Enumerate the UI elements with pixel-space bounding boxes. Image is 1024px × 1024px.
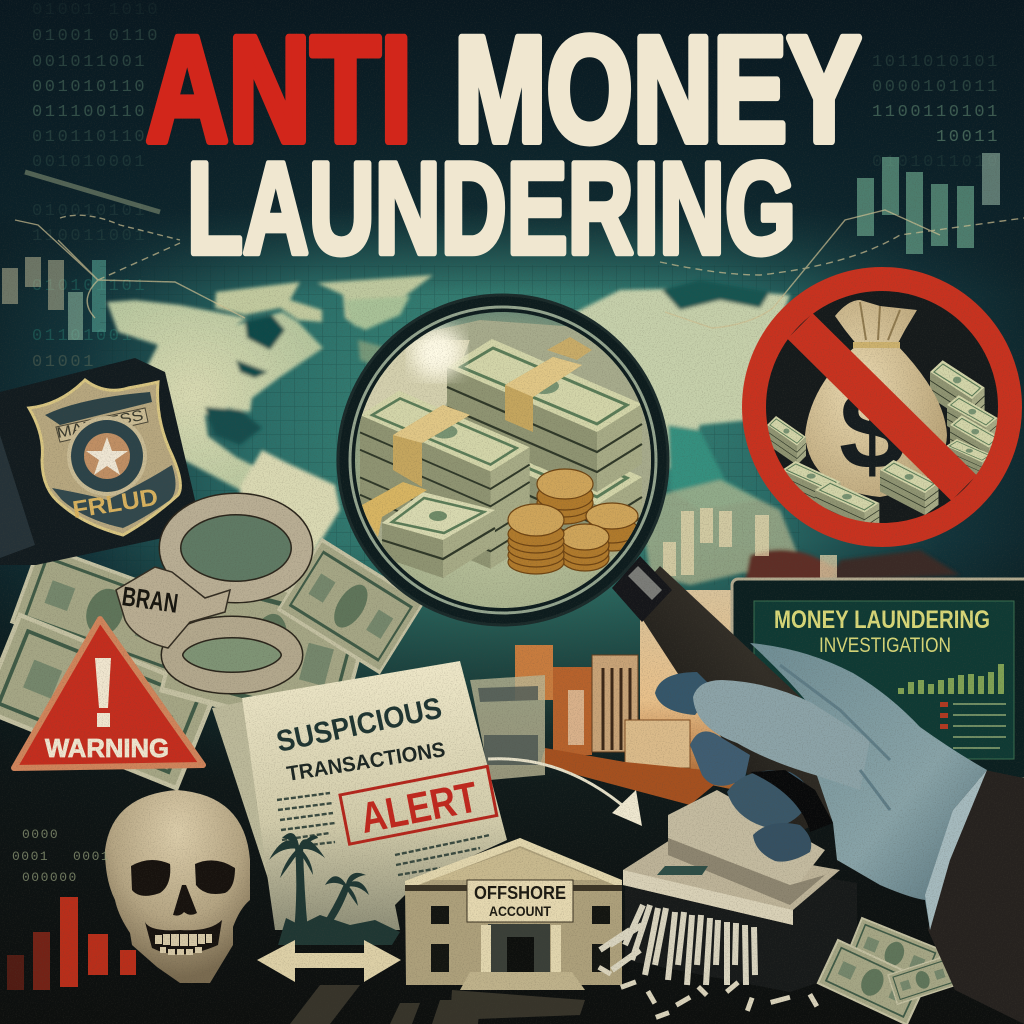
small binary digits lower left: 000000 [22, 870, 78, 885]
candlestick bars on map [663, 508, 837, 579]
binary code columns left: 01001 0110 [32, 27, 160, 46]
binary code columns left: 011010010 [32, 327, 147, 346]
binary code columns left [32, 1, 160, 372]
gloved hand [655, 643, 987, 930]
binary code columns left: 001010110 [32, 78, 147, 97]
magnifying glass handle [612, 556, 840, 835]
bottom cash stack [382, 492, 495, 578]
binary code columns left: 01001 1010 [32, 1, 160, 20]
title [146, 5, 861, 281]
suspicious transactions document: TRANSACTIONS [285, 738, 447, 786]
investigation monitor: INVESTIGATION [819, 634, 951, 657]
binary code columns right: 0000101011 [872, 78, 1000, 97]
binary code columns right [872, 53, 1000, 172]
binary code columns left: 010010101 [32, 202, 147, 221]
candlestick chart right [857, 153, 1000, 254]
handcuffs [116, 504, 302, 683]
paper stack behind document [212, 675, 545, 885]
small binary digits lower left: 0000 [22, 827, 59, 842]
coin stacks [508, 469, 638, 574]
prohibition sign with money bag: $ [839, 367, 905, 492]
handcuffs: BRAN [120, 581, 180, 618]
badge: FRLUD [71, 484, 160, 524]
prohibition sign with money bag [754, 279, 1010, 535]
warning triangle: WARNING [45, 733, 169, 763]
binary code columns right: 10011 [936, 128, 1000, 147]
offshore account bank: ACCOUNT [489, 903, 551, 919]
binary code columns left: 001011001 [32, 53, 147, 72]
scattered banknotes [0, 540, 423, 788]
binary code columns right: 1100110101 [872, 103, 1000, 122]
binary code columns right: 0101011010 [872, 153, 1000, 172]
candlestick chart left [2, 257, 106, 340]
offshore account bank [405, 838, 622, 990]
binary code columns left: 01001 [32, 353, 96, 372]
shredder [598, 790, 857, 1020]
investigation monitor [732, 579, 1024, 779]
badge [29, 380, 180, 535]
banknotes by shredder [818, 918, 957, 1024]
small binary digits lower left: 0001 [73, 849, 110, 864]
suspicious transactions document: SUSPICIOUS [274, 692, 445, 759]
red bar chart [7, 897, 136, 990]
offshore account bank: OFFSHORE [474, 883, 566, 903]
curved flow arrow [488, 759, 642, 826]
world map [100, 265, 960, 585]
binary code columns left: 011100110 [32, 103, 147, 122]
binary code columns left: 010110110 [32, 128, 147, 147]
title: MONEY [454, 5, 861, 173]
small binary digits lower left [12, 827, 110, 885]
binary code columns right: 1011010101 [872, 53, 1000, 72]
small binary digits lower left: 0001 [12, 849, 49, 864]
magnifying glass lens with cash [338, 295, 668, 625]
binary code columns left: 001010001 [32, 153, 147, 172]
double headed arrow [257, 940, 401, 982]
wallet [0, 358, 200, 565]
suspicious transactions document: ALERT [356, 773, 481, 843]
binary code columns left: 110011001 [32, 227, 147, 246]
sleeve [928, 770, 1024, 1024]
suspicious transactions document [242, 661, 507, 945]
skull [105, 790, 250, 983]
city buildings [515, 590, 735, 805]
binary code columns left: 010101101 [32, 277, 147, 296]
warning triangle [14, 619, 203, 768]
title: ANTI [146, 5, 412, 173]
ground tiles [290, 985, 585, 1024]
badge: MANCESS [55, 407, 145, 442]
network route lines [15, 172, 1024, 328]
